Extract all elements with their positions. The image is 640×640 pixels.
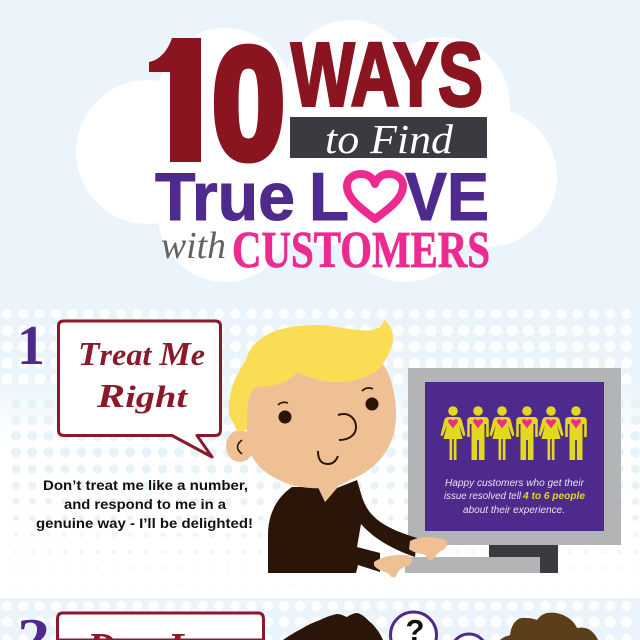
title: L: L [309,159,349,235]
character: blond man [226,320,447,577]
monitor statistic text: 4 to 6 people [522,491,585,502]
monitor [405,368,621,573]
title: number 10 [149,38,283,164]
text block: treat me right description: and respond to me in a [64,497,227,512]
thought bubble: second [451,634,487,640]
monitor stand [489,545,558,573]
title: to Find bar [290,116,487,162]
text block: treat me right description: genuine way - I’ll be delighted! [36,516,253,531]
character left eye [278,402,292,424]
character: dark hair [283,613,383,640]
monitor statistic text: about their experience. [463,505,565,516]
icon: six happy people [440,406,587,460]
thought bubble: question mark [390,612,436,640]
title: to Find bar: to Find [325,116,454,162]
title: CUSTOMERS: CUSTOMERS [232,222,490,279]
speech bubble: Treat Me Right: Right [96,378,189,415]
character face [247,350,396,488]
title [149,38,489,268]
keyboard [405,557,540,573]
monitor screen [425,382,604,531]
title: number 10: 1 [148,22,204,190]
character right eye [362,388,378,410]
title: number 10: 0 [212,16,285,192]
monitor statistic text: Happy customers who get their [445,478,585,489]
monitor frame [408,368,621,545]
text block: treat me right description [36,478,253,531]
speech bubble: Treat Me Right: Treat Me [78,336,205,373]
character: brown curly hair [500,613,598,640]
icon: heart as O [347,174,403,219]
panel: section 1 dotted background [0,314,640,585]
monitor statistic text [444,478,585,516]
title: True: True [155,159,295,235]
header background [0,0,640,376]
title: VE: VE [405,159,489,235]
character mouth [318,451,338,464]
title: with: with [161,225,226,267]
monitor statistic text: issue resolved tell [444,491,522,502]
speech bubble: Treat Me Right [58,321,220,457]
character ear [226,430,254,462]
number 1: 1 [17,315,45,377]
character nose [338,414,356,440]
character hands [374,537,447,577]
panel: section 2 [0,598,640,640]
character body [268,480,417,573]
speech bubble: section 2 [58,613,264,640]
character neck [316,482,340,502]
title: WAYS: WAYS [291,26,483,126]
character hair [229,320,393,432]
text block: treat me right description: Don’t treat me like a number, [43,478,248,493]
cloud [76,20,557,282]
section 2 dotted background [0,598,640,640]
